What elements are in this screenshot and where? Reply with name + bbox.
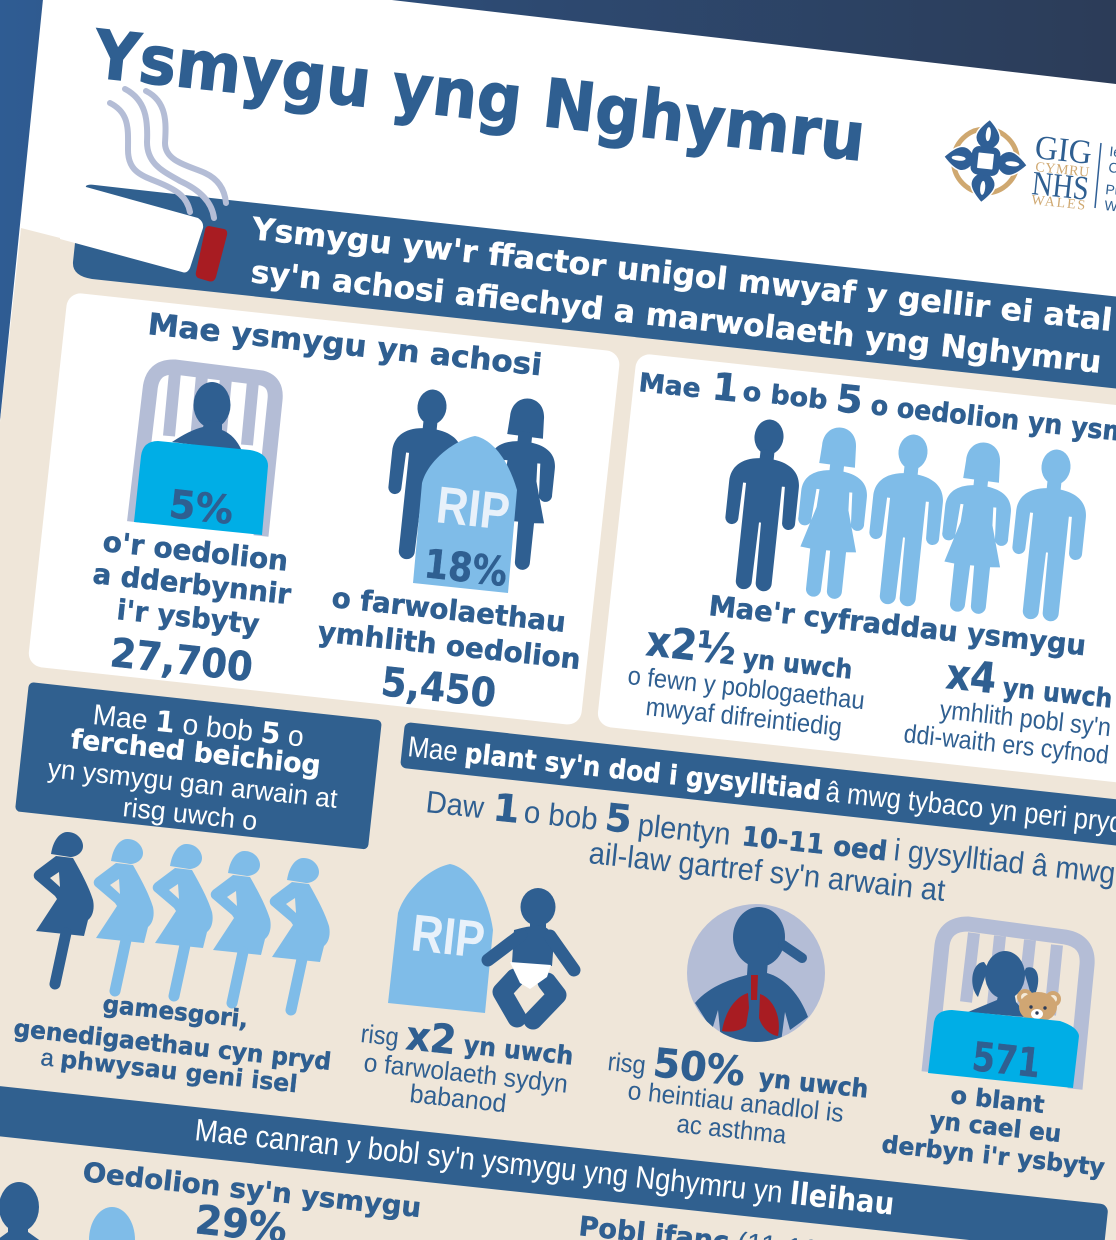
stat: x2.5 higher	[626, 616, 866, 742]
stat: x4 higher: x4	[944, 649, 999, 703]
text: children admitted to hospital: o blant	[949, 1081, 1046, 1119]
logo: GIG Cymru NHS Wales: CYMRU	[1035, 160, 1090, 181]
text: respiratory infections: o heintiau anadlol is	[626, 1075, 845, 1128]
stat: x2.5 higher: mwyaf difreintiedig	[644, 691, 843, 742]
text: adult deaths: ymhlith oedolion	[316, 615, 582, 676]
heading: Mae ysmygu yn achosi	[146, 307, 544, 383]
box text: yn ysmygu gan arwain at	[46, 753, 339, 814]
banner text: Ysmygu yw'r ffactor unigol mwyaf y gellir ei atal	[249, 211, 1114, 339]
text: respiratory infections: 50%	[651, 1040, 747, 1096]
banner text	[406, 731, 1116, 842]
text: miscarriage and premature birth: genedigaethau cyn pryd	[12, 1014, 333, 1076]
heading	[637, 364, 1116, 454]
text: 1 in 5 children exposed	[424, 784, 1116, 908]
text: adult deaths: o farwolaethau	[330, 581, 567, 639]
icon: mourners and gravestone	[381, 386, 562, 596]
text: children admitted to hospital: derbyn i'r ysbyty	[880, 1130, 1106, 1182]
text: adult deaths	[316, 581, 582, 717]
icon: smoker with lungs	[687, 904, 825, 1050]
text: miscarriage and premature birth: gamesgori,	[101, 990, 250, 1033]
text: 1 in 5 children exposed: o bob	[522, 794, 600, 837]
bottom banner	[0, 1084, 1109, 1240]
icon: mourners and gravestone: RIP	[434, 476, 513, 542]
panel: pregnant women heading box	[15, 682, 382, 850]
text: adults admitted to hospital: o'r oedolion	[101, 525, 290, 578]
logo: GIG Cymru NHS Wales: GIG	[1033, 129, 1094, 172]
text: children admitted to hospital	[880, 1081, 1106, 1182]
text: respiratory infections: ac asthma	[675, 1108, 788, 1150]
logo: GIG Cymru NHS Wales: WALES	[1031, 193, 1086, 214]
text: 1 in 5 children exposed: 5	[603, 795, 634, 842]
icon: child in hospital bed with teddy: 571	[970, 1034, 1042, 1087]
stat: x2.5 higher: x2½	[644, 616, 739, 675]
logo: GIG Cymru NHS Wales	[939, 115, 1116, 217]
text: sudden infant death	[359, 1013, 575, 1118]
text: sudden infant death: babanod	[408, 1078, 508, 1118]
section: adult smokers trend: Oedolion sy'n ysmygu	[81, 1157, 423, 1224]
text: sudden infant death: x2	[404, 1013, 459, 1064]
banner text: sy'n achosi afiechyd a marwolaeth yng Nghymru	[249, 254, 1103, 381]
heading: o bob	[741, 377, 829, 416]
icon: five pregnant women, one highlighted	[34, 832, 330, 1010]
subheading: smoking rates: Mae'r cyfraddau ysmygu	[707, 589, 1088, 662]
banner text: Mae	[406, 731, 459, 768]
icon: gravestone and baby	[388, 864, 574, 1020]
text: respiratory infections: yn uwch	[757, 1063, 870, 1104]
box text: Mae 1 o bob 5 o	[91, 697, 306, 753]
text: 1 in 5 children exposed: ail-law gartref sy'n arwain at	[587, 835, 947, 908]
text: 1 in 5 children exposed: Daw	[424, 784, 486, 825]
icon: smoke	[110, 89, 226, 218]
icon: adult figures cropped	[0, 1182, 135, 1240]
stat: x2.5 higher: o fewn y poblogaethau	[626, 660, 866, 715]
box text: ferched beichiog	[69, 724, 322, 782]
text: 1 in 5 children exposed: plentyn	[636, 807, 732, 852]
text: adult deaths: 5,450	[379, 659, 498, 717]
panel: 1 in 5 adults smoke	[597, 353, 1116, 791]
icon: mourners and gravestone: 18%	[422, 541, 509, 596]
text: adults admitted to hospital: a dderbynnir	[91, 557, 293, 611]
text: sudden infant death: yn uwch	[462, 1030, 575, 1071]
text: adults admitted to hospital: 27,700	[108, 630, 255, 691]
text: 1 in 5 children exposed: 1	[491, 785, 522, 832]
text: respiratory infections	[606, 1040, 870, 1150]
panel: children banner	[400, 722, 1116, 854]
section: adult smokers trend	[0, 1157, 423, 1240]
heading: 1	[710, 364, 741, 411]
logo: GIG Cymru NHS Wales: NHS	[1030, 165, 1091, 208]
panel: smoking causes	[27, 292, 621, 726]
text: sudden infant death: o farwolaeth sydyn	[362, 1047, 569, 1099]
text: adults admitted to hospital	[91, 525, 293, 691]
text: sudden infant death: risg	[359, 1018, 400, 1052]
title: Ysmygu yng Nghymru	[89, 15, 869, 177]
banner with cigarette	[60, 89, 1116, 390]
icon: five adult figures, one highlighted	[718, 416, 1093, 624]
banner text: plant sy'n dod i gysylltiad	[463, 738, 823, 807]
icon: teddy	[1017, 989, 1061, 1022]
box text: risg uwch o	[121, 792, 259, 836]
icon: child in hospital bed with teddy	[928, 924, 1087, 1089]
icon: gravestone and baby: RIP	[409, 904, 488, 970]
banner text: Mae canran y bobl sy'n ysmygu yng Nghymru yn lleihau	[193, 1112, 896, 1223]
icon: adult in hospital bed: 5%	[167, 482, 235, 534]
heading: Mae	[637, 368, 702, 405]
text: 1 in 5 children exposed: 10-11 oed	[740, 821, 889, 867]
text: adults admitted to hospital: i'r ysbyty	[115, 593, 261, 641]
heading: 5	[834, 376, 865, 423]
text: miscarriage and premature birth: a phwysau geni isel	[39, 1043, 299, 1098]
stat: x4 higher	[902, 649, 1114, 770]
text: respiratory infections: risg	[606, 1046, 647, 1080]
text: miscarriage and premature birth	[12, 990, 333, 1098]
icon: adult in hospital bed	[134, 367, 275, 536]
box text	[46, 697, 339, 836]
stat: x2.5 higher: yn uwch	[741, 644, 854, 686]
text: children admitted to hospital: yn cael eu	[928, 1106, 1063, 1148]
